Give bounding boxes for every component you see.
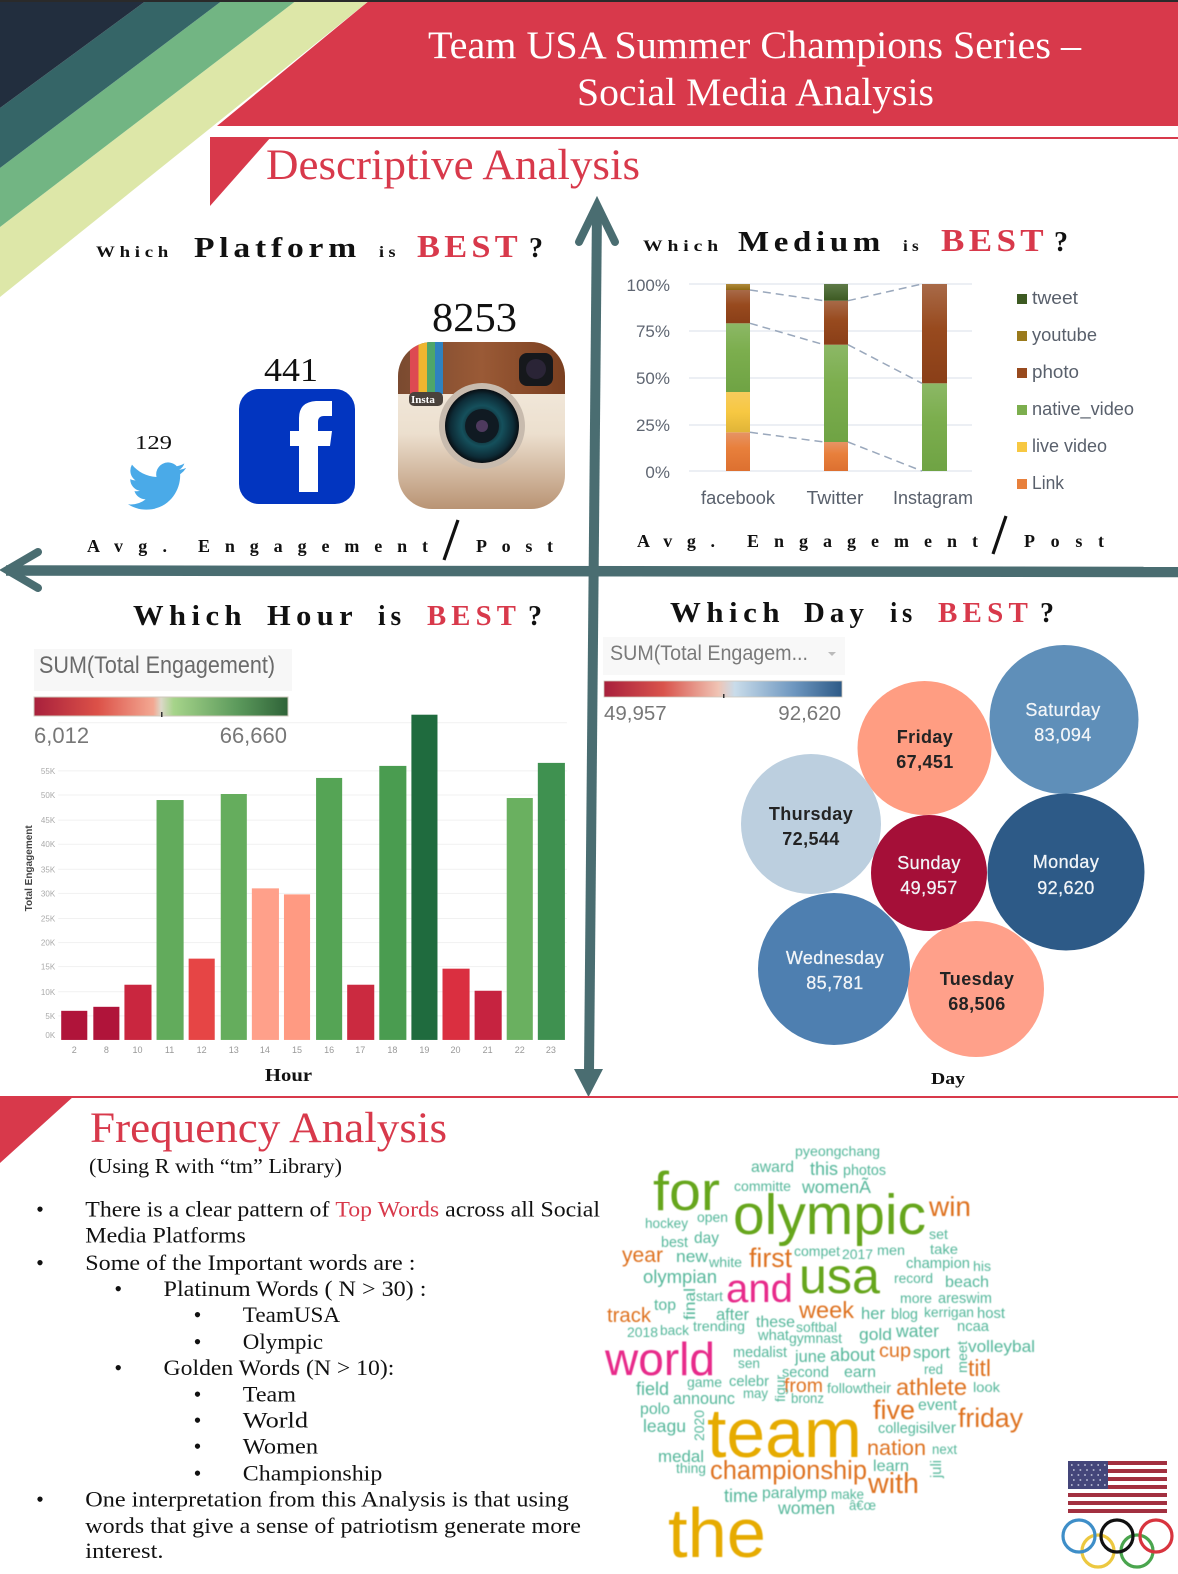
legend: medium: live video xyxy=(1032,436,1107,456)
word cloud: team xyxy=(707,1394,862,1472)
axis label: avg engagement per post xyxy=(87,520,553,560)
heading: which day is best: is xyxy=(890,598,917,629)
heading: which day is best: Which xyxy=(670,598,785,629)
word cloud: event xyxy=(918,1397,958,1414)
word cloud: set xyxy=(929,1226,948,1242)
bar chart: engagement by hour xyxy=(24,715,567,1085)
word cloud: award xyxy=(751,1159,794,1176)
word cloud: blog xyxy=(891,1306,918,1323)
legend: total engagement by hour: 66,660 xyxy=(220,723,287,748)
bar chart: engagement by hour: 11 xyxy=(165,1045,174,1055)
word cloud: and xyxy=(726,1267,793,1311)
bar chart: engagement by hour: 20 xyxy=(451,1045,461,1055)
heading: which hour is best xyxy=(133,601,547,632)
bar chart: engagement by hour: 13 xyxy=(229,1045,239,1055)
bubble chart: engagement by day xyxy=(741,645,1144,1088)
word cloud: meet xyxy=(954,1341,970,1373)
bubble chart: engagement by day: 83,094 xyxy=(1034,725,1092,745)
bar chart: engagement by hour: Hour xyxy=(265,1065,312,1085)
bar chart: engagement by hour: 45K xyxy=(41,816,56,825)
bubble chart: engagement by day: Tuesday xyxy=(940,969,1014,989)
stacked bar chart: 50% xyxy=(636,369,670,388)
stacked bar chart: 75% xyxy=(636,322,670,341)
heading: which day is best: ? xyxy=(1040,598,1059,629)
legend: total engagement by day: SUM(Total Engagem... xyxy=(610,642,808,665)
legend: medium: tweet xyxy=(1032,288,1078,308)
word cloud: titl xyxy=(968,1355,991,1381)
word cloud: athlete xyxy=(896,1374,967,1400)
text block: findings: • xyxy=(114,1276,122,1301)
word cloud: week xyxy=(798,1297,854,1323)
text block: findings: • xyxy=(36,1197,44,1222)
bar chart: engagement by hour: 5K xyxy=(45,1012,56,1021)
text block: findings: Women xyxy=(243,1433,318,1459)
word cloud: paralymp xyxy=(762,1485,827,1502)
word cloud: take xyxy=(930,1241,958,1257)
word cloud: her xyxy=(861,1304,885,1323)
word cloud: men xyxy=(877,1242,905,1258)
word cloud: first xyxy=(749,1243,792,1273)
heading: descriptive analysis xyxy=(210,137,1178,206)
title: Team USA Summer Champions Series – xyxy=(428,24,1082,67)
bar chart: engagement by hour: 14 xyxy=(260,1045,270,1055)
legend: total engagement by hour xyxy=(34,649,292,748)
word cloud: softbal xyxy=(796,1319,837,1335)
heading: frequency analysis xyxy=(0,1096,1178,1178)
bar chart: engagement by hour: 10K xyxy=(41,988,56,997)
text block: findings: • xyxy=(194,1381,201,1406)
heading: frequency analysis: (Using R with “tm” Library) xyxy=(89,1154,342,1178)
word cloud: hockey xyxy=(645,1216,688,1231)
word cloud: second xyxy=(782,1365,829,1381)
icon: usa flag xyxy=(1068,1461,1167,1513)
word cloud: photos xyxy=(843,1163,886,1179)
bubble chart: engagement by day: Day xyxy=(931,1069,966,1088)
word cloud: about xyxy=(830,1345,875,1365)
heading: which medium is best: ? xyxy=(1054,227,1072,258)
bar chart: engagement by hour: 2 xyxy=(72,1045,77,1055)
stacked bar chart: Twitter xyxy=(806,488,864,508)
bubble chart: engagement by day: Monday xyxy=(1033,852,1099,872)
axis label: avg engagement per post: Engagement xyxy=(747,531,978,551)
word cloud: new xyxy=(676,1247,709,1266)
heading: which medium is best xyxy=(643,222,1072,258)
word cloud: olympian xyxy=(643,1266,717,1287)
word cloud: silver xyxy=(919,1420,957,1437)
word cloud: 2018 xyxy=(627,1324,658,1340)
word cloud: volleybal xyxy=(968,1337,1035,1356)
word cloud: gymnast xyxy=(789,1330,842,1346)
word cloud: bronz xyxy=(791,1391,824,1406)
legend: medium xyxy=(1017,288,1134,493)
bar chart: engagement by hour: 15 xyxy=(292,1045,302,1055)
bubble chart: engagement by day: Wednesday xyxy=(786,948,884,968)
word cloud: usa xyxy=(799,1248,880,1304)
bar chart: engagement by hour: 18 xyxy=(387,1045,397,1055)
word cloud: host xyxy=(977,1305,1006,1322)
word cloud: learn xyxy=(873,1458,909,1475)
bar chart: engagement by hour: 20K xyxy=(41,939,56,948)
text block: findings: • xyxy=(36,1250,44,1275)
text block: findings: One interpretation from this Analysis is that using xyxy=(85,1487,569,1512)
heading: which hour is best: ? xyxy=(528,601,547,632)
word cloud: champion xyxy=(906,1255,970,1272)
word cloud: his xyxy=(973,1258,991,1274)
word cloud: championship xyxy=(710,1457,867,1485)
word cloud: day xyxy=(694,1230,719,1247)
text block: findings: • xyxy=(114,1355,122,1380)
word cloud: celebr xyxy=(729,1374,769,1390)
bubble chart: engagement by day: Thursday xyxy=(769,804,853,824)
stacked bar chart: 25% xyxy=(636,416,670,435)
word cloud: make xyxy=(831,1486,864,1502)
bar chart: engagement by hour: 0K xyxy=(45,1031,56,1040)
legend: total engagement by hour: 6,012 xyxy=(34,723,89,748)
bar chart: engagement by hour: 12 xyxy=(197,1045,207,1055)
word cloud: womenÃ xyxy=(801,1176,871,1197)
legend: medium: native_video xyxy=(1032,399,1134,420)
word cloud: sen xyxy=(738,1355,760,1371)
word cloud: follow xyxy=(827,1380,864,1396)
heading: which platform is best: Which xyxy=(96,244,173,261)
stacked bar chart: Instagram xyxy=(893,488,973,508)
icon: facebook xyxy=(239,352,355,504)
word cloud: final xyxy=(682,1288,699,1320)
panel: hour xyxy=(24,601,567,1085)
bubble chart: engagement by day: 72,544 xyxy=(782,829,840,849)
word cloud: 2017 xyxy=(842,1246,873,1262)
bar chart: engagement by hour: Total Engagement xyxy=(24,825,35,911)
word cloud: beach xyxy=(945,1274,989,1291)
text block: findings: There is a clear pattern of Top Words across all Social xyxy=(85,1197,600,1222)
legend: total engagement by day: 92,620 xyxy=(778,702,841,725)
heading: which hour is best: Which xyxy=(133,601,247,632)
heading: which day is best: BEST xyxy=(938,598,1033,629)
word cloud: five xyxy=(873,1395,915,1425)
text block: findings: • xyxy=(36,1487,44,1512)
word cloud: start xyxy=(696,1289,723,1304)
word cloud: what xyxy=(757,1328,789,1344)
word cloud: trending xyxy=(693,1318,745,1334)
axis label: avg engagement per post: Post xyxy=(476,536,553,556)
heading: which platform is best xyxy=(96,228,547,264)
panel: day xyxy=(603,598,1144,1088)
heading: which platform is best: is xyxy=(379,244,400,261)
bar chart: engagement by hour: 10 xyxy=(132,1045,142,1055)
word cloud: olympic xyxy=(733,1183,926,1247)
word cloud: cup xyxy=(879,1341,911,1362)
icon: olympic rings xyxy=(1063,1520,1172,1567)
panel: frequency analysis xyxy=(0,1096,1178,1572)
legend: total engagement by hour: SUM(Total Engagement) xyxy=(39,652,275,679)
word cloud: year xyxy=(622,1244,663,1267)
word cloud: may xyxy=(743,1386,768,1401)
text block: findings: Team xyxy=(243,1381,296,1406)
text block: findings xyxy=(36,1197,600,1563)
text block: findings: words that give a sense of patriotism generate more xyxy=(85,1513,581,1538)
bubble chart: engagement by day: Friday xyxy=(897,727,953,747)
bar chart: engagement by hour: 19 xyxy=(419,1045,429,1055)
icon: twitter xyxy=(128,432,186,510)
word cloud: next xyxy=(932,1442,957,1457)
word cloud: medal xyxy=(658,1447,704,1466)
word cloud: their xyxy=(863,1381,891,1397)
bubble chart: engagement by day: 68,506 xyxy=(948,994,1006,1014)
header banner xyxy=(0,0,1178,297)
word cloud: gold xyxy=(859,1325,892,1344)
text block: findings: Media Platforms xyxy=(85,1223,246,1248)
heading: which day is best: Day xyxy=(804,598,869,629)
bubble chart: engagement by day: 49,957 xyxy=(900,878,958,898)
legend: total engagement by day: 49,957 xyxy=(604,702,667,725)
bar chart: engagement by hour: 15K xyxy=(41,963,56,972)
heading: which platform is best: ? xyxy=(529,233,547,264)
word cloud: collegi xyxy=(878,1421,919,1437)
bar chart: engagement by hour: 55K xyxy=(41,767,56,776)
word cloud: open xyxy=(697,1209,728,1225)
word cloud: back xyxy=(660,1323,689,1338)
axis label: avg engagement per post: Avg. xyxy=(637,531,715,551)
bar chart: engagement by hour: 21 xyxy=(483,1045,493,1055)
word cloud: nation xyxy=(867,1436,926,1460)
legend: total engagement by day xyxy=(603,637,845,725)
text block: findings: Olympic xyxy=(243,1329,323,1354)
stacked bar chart: facebook xyxy=(701,488,776,508)
bar chart: engagement by hour: 16 xyxy=(324,1045,334,1055)
legend: medium: Link xyxy=(1032,473,1065,493)
bubble chart: engagement by day: 92,620 xyxy=(1037,878,1095,898)
word cloud: earn xyxy=(844,1364,876,1381)
panel: medium xyxy=(627,222,1134,554)
word cloud: time xyxy=(724,1486,758,1506)
word cloud: leagu xyxy=(643,1416,686,1436)
word cloud: polo xyxy=(640,1401,670,1418)
word cloud: swim xyxy=(959,1291,992,1307)
icon: instagram: 8253 xyxy=(432,294,517,340)
word cloud: after xyxy=(716,1306,749,1324)
heading: frequency analysis: Frequency Analysis xyxy=(90,1105,447,1152)
bubble chart: engagement by day: Sunday xyxy=(897,853,961,873)
text block: findings: interest. xyxy=(85,1538,164,1563)
word cloud: the xyxy=(668,1494,766,1572)
word cloud: best xyxy=(661,1235,688,1251)
bar chart: engagement by hour: 40K xyxy=(41,840,56,849)
word cloud xyxy=(604,1143,1035,1572)
bubble chart: engagement by day: 85,781 xyxy=(806,973,864,993)
heading: which medium is best: BEST xyxy=(941,222,1048,258)
word cloud: these xyxy=(756,1314,795,1331)
word cloud: more xyxy=(900,1290,932,1306)
text block: findings: • xyxy=(194,1433,201,1459)
text block: findings: Championship xyxy=(243,1461,382,1486)
stacked bar chart xyxy=(627,276,973,508)
title xyxy=(428,24,1082,114)
bubble chart: engagement by day: 67,451 xyxy=(896,752,954,772)
heading: which platform is best: BEST xyxy=(417,228,522,264)
axis label: avg engagement per post: Avg. xyxy=(87,536,167,556)
word cloud: pyeongchang xyxy=(795,1143,880,1159)
word cloud: juli xyxy=(928,1460,945,1479)
word cloud: kerrigan xyxy=(924,1304,974,1320)
text block: findings: • xyxy=(194,1461,201,1486)
text block: findings: TeamUSA xyxy=(243,1302,340,1327)
word cloud: ncaa xyxy=(957,1319,990,1335)
word cloud: 2020 xyxy=(691,1410,707,1441)
word cloud: announc xyxy=(673,1390,735,1408)
arrows: quadrant axes xyxy=(6,205,1178,1097)
word cloud: june xyxy=(794,1348,826,1366)
text block: findings: World xyxy=(243,1407,308,1432)
text block: findings: • xyxy=(194,1329,201,1354)
heading: which platform is best: Platform xyxy=(194,233,361,264)
word cloud: medalist xyxy=(733,1345,787,1361)
bar chart: engagement by hour: 17 xyxy=(355,1045,365,1055)
word cloud: top xyxy=(654,1297,676,1314)
axis label: avg engagement per post: Post xyxy=(1024,531,1104,551)
legend: medium: youtube xyxy=(1032,325,1097,345)
word cloud: red xyxy=(924,1362,943,1377)
word cloud: committe xyxy=(734,1179,791,1194)
bubble chart: engagement by day: Saturday xyxy=(1025,700,1101,720)
bar chart: engagement by hour: 50K xyxy=(41,791,56,800)
heading: which hour is best: Hour xyxy=(267,601,358,632)
heading: which day is best xyxy=(670,598,1059,629)
bar chart: engagement by hour: 35K xyxy=(41,865,56,874)
text block: findings: Platinum Words ( N > 30) : xyxy=(164,1276,426,1301)
heading: which medium is best: is xyxy=(903,238,923,255)
word cloud: compet xyxy=(794,1243,840,1259)
word cloud: for xyxy=(653,1160,720,1222)
icon: facebook: 441 xyxy=(264,352,318,389)
icon: twitter: 129 xyxy=(135,432,172,454)
text block: findings: • xyxy=(194,1302,201,1327)
word cloud: this xyxy=(810,1159,838,1179)
word cloud: white xyxy=(708,1254,742,1270)
text block: findings: • xyxy=(194,1407,201,1432)
legend: medium: photo xyxy=(1032,362,1079,382)
word cloud: look xyxy=(973,1379,1001,1395)
text block: findings: Golden Words (N > 10): xyxy=(164,1355,394,1380)
bar chart: engagement by hour: 22 xyxy=(515,1045,525,1055)
word cloud: field xyxy=(636,1379,669,1399)
axis label: avg engagement per post xyxy=(637,516,1104,554)
stacked bar chart: 100% xyxy=(627,276,670,295)
word cloud: women xyxy=(777,1498,835,1518)
bar chart: engagement by hour: 23 xyxy=(546,1045,556,1055)
word cloud: with xyxy=(867,1468,919,1500)
word cloud: world xyxy=(604,1333,715,1385)
word cloud: track xyxy=(607,1305,652,1327)
word cloud: â€œ xyxy=(849,1497,876,1513)
heading: which medium is best: Which xyxy=(643,238,723,255)
word cloud: water xyxy=(895,1321,939,1341)
word cloud: sport xyxy=(913,1344,950,1362)
panel: platform xyxy=(87,228,565,560)
icon: instagram: Insta xyxy=(411,394,435,406)
word cloud: record xyxy=(894,1270,933,1286)
heading: which medium is best: Medium xyxy=(738,227,885,258)
icon: instagram xyxy=(398,294,565,509)
heading: which hour is best: BEST xyxy=(427,601,521,632)
text block: findings: Some of the Important words are : xyxy=(85,1250,415,1275)
title: Social Media Analysis xyxy=(577,71,934,114)
word cloud: from xyxy=(784,1375,823,1397)
heading: descriptive analysis: Descriptive Analysis xyxy=(266,142,640,189)
word cloud: game xyxy=(687,1374,722,1390)
word cloud: figur xyxy=(772,1375,788,1402)
word cloud: are xyxy=(938,1290,959,1307)
stacked bar chart: 0% xyxy=(645,463,670,482)
word cloud: friday xyxy=(958,1403,1024,1433)
bar chart: engagement by hour: 30K xyxy=(41,889,56,898)
bar chart: engagement by hour: 25K xyxy=(41,914,56,923)
word cloud: win xyxy=(928,1191,971,1222)
bar chart: engagement by hour: 8 xyxy=(104,1045,109,1055)
word cloud: thing xyxy=(676,1461,706,1476)
axis label: avg engagement per post: Engagement xyxy=(198,536,428,556)
heading: which hour is best: is xyxy=(378,601,406,632)
